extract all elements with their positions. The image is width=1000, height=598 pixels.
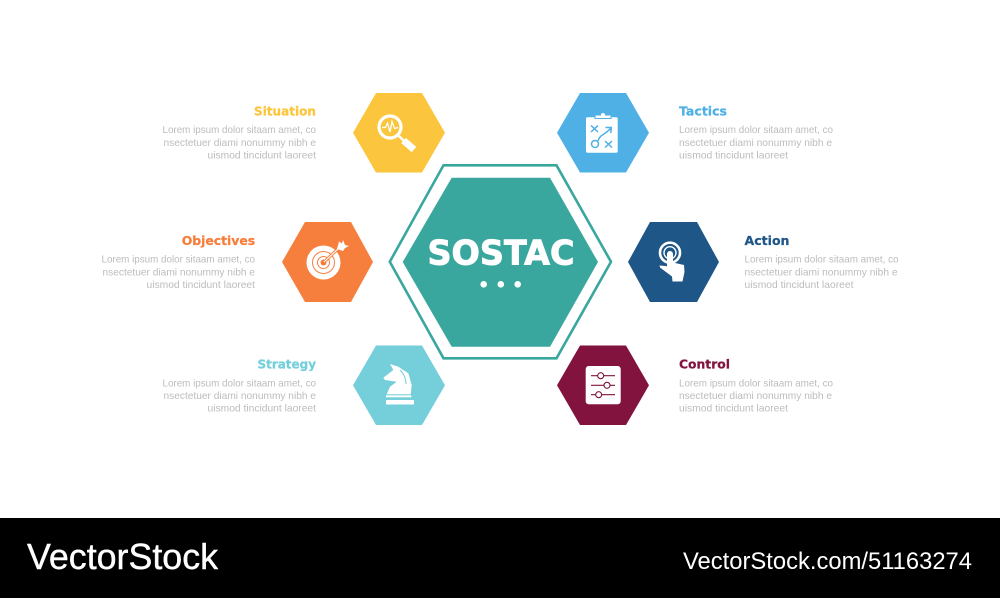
text block: Objectives: Objectives	[182, 233, 255, 248]
text block: Strategy: Strategy	[258, 356, 316, 372]
text block: Tactics: Tactics	[679, 104, 727, 118]
hexagon: Tactics	[557, 93, 649, 172]
central hexagon: SOSTAC	[390, 165, 611, 358]
text block: Control: nsectetuer diami nonummy nibh e	[679, 390, 832, 402]
footer url text: VectorStock.com/51163274	[683, 548, 972, 575]
footer band	[0, 518, 1000, 598]
hexagon: Situation	[353, 93, 445, 172]
text block: Strategy: Lorem ipsum dolor sitaam amet, co	[162, 377, 316, 389]
text block: Tactics: uismod tincidunt laoreet	[679, 150, 788, 162]
icon: touch hand	[660, 243, 684, 282]
text block: Strategy: uismod tincidunt laoreet	[208, 403, 316, 415]
icon: clipboard with play diagram	[586, 112, 618, 153]
text block: Objectives: uismod tincidunt laoreet	[146, 279, 255, 291]
text block: Situation: Lorem ipsum dolor sitaam amet, co	[162, 124, 316, 136]
text block: Situation: nsectetuer diami nonummy nibh e	[164, 137, 316, 149]
text block: Tactics: Lorem ipsum dolor sitaam amet, co	[679, 124, 833, 136]
text block: Objectives: Lorem ipsum dolor sitaam amet, co	[102, 254, 255, 266]
text block: Strategy	[162, 356, 316, 415]
text block: Action: uismod tincidunt laoreet	[744, 279, 854, 291]
text block: Tactics	[679, 104, 833, 162]
icon: sliders panel	[586, 366, 621, 404]
hexagon: Objectives	[282, 222, 373, 302]
footer logo text: VectorStock	[27, 536, 219, 577]
text block: Action: nsectetuer diami nonummy nibh e	[744, 266, 898, 278]
icon: magnifier with pulse	[379, 116, 414, 150]
text block: Control: uismod tincidunt laoreet	[679, 403, 788, 415]
text block: Action	[744, 233, 899, 291]
text block: Objectives	[102, 233, 255, 291]
text block: Action: Action	[744, 233, 790, 248]
text block: Situation	[162, 104, 316, 162]
text block: Action: Lorem ipsum dolor sitaam amet, co	[744, 254, 899, 266]
central dots	[480, 281, 521, 288]
text block: Control	[679, 356, 833, 415]
hexagon: Control	[557, 346, 649, 425]
icon: chess knight	[383, 364, 414, 404]
text block: Strategy: nsectetuer diami nonummy nibh e	[164, 390, 316, 402]
icon: target with arrow	[306, 240, 349, 280]
text block: Objectives: nsectetuer diami nonummy nibh e	[102, 266, 255, 278]
hexagon: Strategy	[353, 346, 445, 425]
text block: Control: Control	[679, 356, 730, 372]
hexagon: Action	[628, 222, 719, 302]
text block: Situation: uismod tincidunt laoreet	[208, 150, 316, 162]
text block: Control: Lorem ipsum dolor sitaam amet, co	[679, 377, 833, 389]
central title: SOSTAC	[428, 234, 574, 274]
text block: Tactics: nsectetuer diami nonummy nibh e	[679, 137, 832, 149]
text block: Situation: Situation	[254, 104, 316, 118]
